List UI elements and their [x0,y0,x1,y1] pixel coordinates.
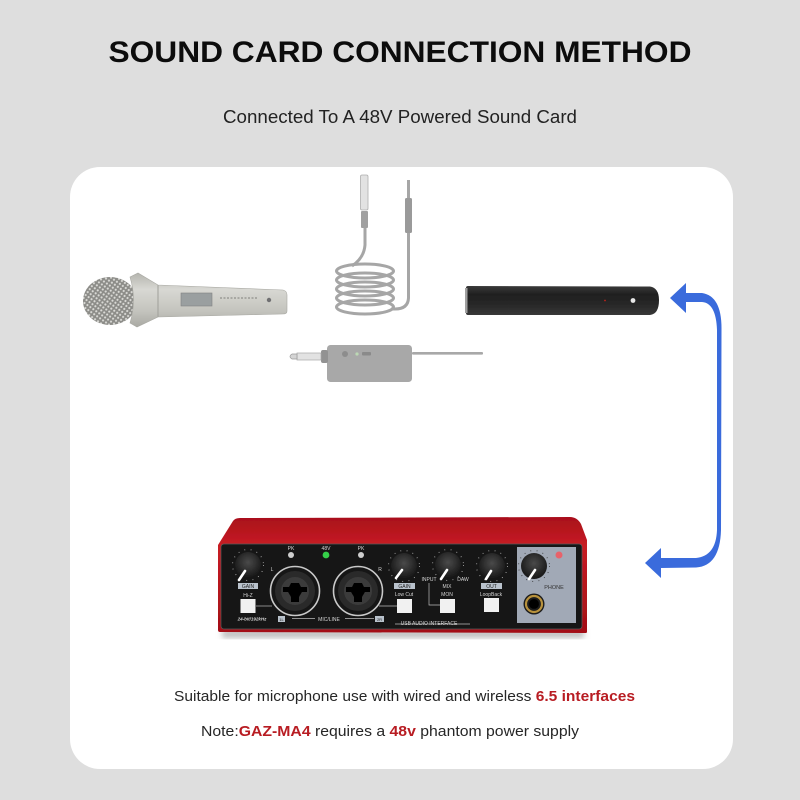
caption: suitability: Suitable for microphone use with wired and wireless 6.5 interfaces [174,688,635,705]
knob: left gain [232,550,264,580]
panel labels: INPUT [422,577,436,583]
knob: phone [518,550,550,582]
panel labels: 2R [377,617,382,622]
knob: right gain [388,550,420,582]
panel labels [237,546,564,627]
knob: out [476,550,508,582]
arrow: two-way connection [645,283,722,578]
indicator LEDs [288,552,562,558]
headphone jack [524,594,544,614]
audio interface [218,517,587,633]
icon: wireless transmitter [290,345,483,382]
panel labels: Low Cut [395,592,414,598]
phones section panel [517,547,576,623]
panel labels: MIX [443,584,452,590]
panel labels: R [378,567,382,573]
panel labels: PHONE [544,585,564,591]
icon: handheld microphone [83,273,287,327]
white push buttons [240,598,499,613]
panel connector lines [256,583,470,624]
subtitle: Connected To A 48V Powered Sound Card [223,107,577,127]
panel labels: GAIN [398,584,411,590]
red top housing [218,517,587,633]
panel labels: PK [288,546,295,552]
icon: black phantom power adapter [465,286,659,315]
combo jack 2 [334,566,382,616]
panel labels: LoopBack [480,592,503,598]
black front panel [221,544,582,629]
panel: connection diagram [70,167,733,769]
panel labels: L [271,567,274,573]
title: SOUND CARD CONNECTION METHOD [108,36,692,69]
panel labels: MON [441,592,453,598]
icon: microphone cable with plugs [336,175,412,314]
knob: mix [432,550,464,580]
panel labels: GAIN [242,584,254,590]
panel labels: MIC/LINE [318,617,340,623]
panel labels: Hi-Z [243,593,253,599]
panel labels: 48V [322,546,331,552]
caption: phantom power note: Note:GAZ-MA4 requires a 48v phantom power supply [201,723,580,740]
panel labels: USB AUDIO INTERFACE [401,621,458,627]
panel labels: OUT [486,584,497,590]
panel labels: 24-bit/192kHz [237,616,267,622]
panel labels: DAW [457,577,469,583]
panel labels: 1L [279,617,284,622]
interface shadow [222,630,584,638]
combo jack 1 [270,566,320,616]
panel labels: PK [358,546,365,552]
